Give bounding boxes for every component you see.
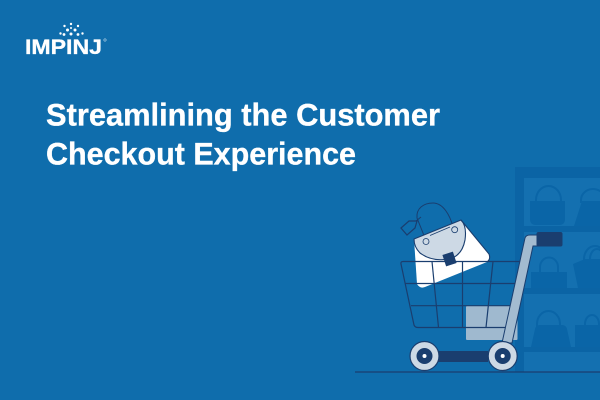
bag right edge	[461, 220, 490, 262]
shelf bag handles	[536, 186, 600, 328]
cart handle grip	[536, 232, 562, 246]
illustration: box in cart	[466, 306, 518, 340]
cart handle post	[502, 235, 538, 343]
logo dots	[59, 23, 84, 36]
bag lock	[442, 252, 457, 266]
title	[46, 96, 440, 172]
logo: Impinj	[25, 23, 106, 59]
bag rings	[423, 238, 429, 244]
bag body	[414, 220, 490, 288]
illustration: shopping cart	[401, 232, 562, 370]
flap seam	[430, 227, 450, 236]
title: Streamlining the Customer	[46, 96, 440, 132]
bag flap	[414, 220, 466, 260]
illustration: background store shelf with bags	[515, 167, 600, 372]
cart axle	[438, 351, 488, 362]
shelf panels	[524, 178, 600, 372]
title: Checkout Experience	[46, 136, 356, 172]
price tag	[401, 221, 417, 235]
illustration: handbag	[401, 203, 490, 288]
ground line	[355, 371, 600, 373]
right wheel	[488, 342, 517, 370]
cart basket wire	[401, 262, 520, 328]
registered mark	[104, 39, 106, 41]
logo wordmark: IMPINJ	[25, 36, 102, 59]
bag strap	[417, 203, 453, 238]
shelf bags	[530, 201, 600, 347]
tag string	[416, 217, 421, 221]
shelf frame	[515, 167, 600, 372]
left wheel	[410, 342, 439, 370]
